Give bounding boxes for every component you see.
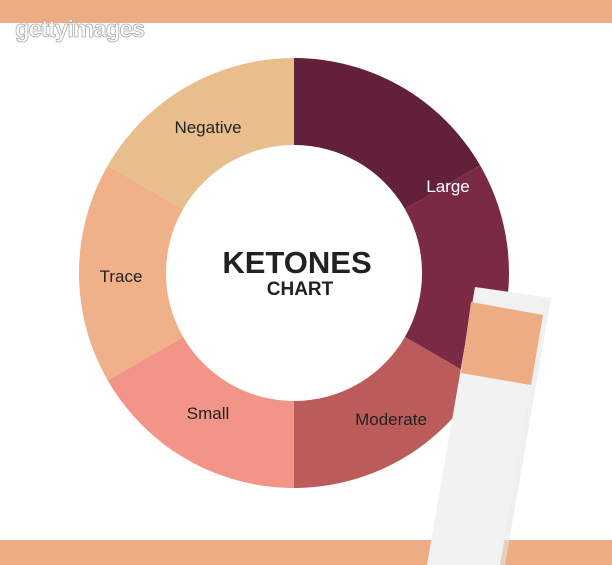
strip pad bbox=[461, 302, 543, 385]
label: Small: Small bbox=[187, 404, 229, 423]
segment: Negative bbox=[108, 58, 294, 209]
title: KETONES bbox=[222, 245, 372, 280]
segment: Moderate bbox=[294, 337, 480, 488]
test strip bbox=[427, 287, 551, 565]
label: Trace: Trace bbox=[100, 267, 142, 286]
bottom band bbox=[0, 540, 612, 565]
watermark text: gettyimages bbox=[15, 16, 145, 43]
segment: Large bbox=[405, 166, 509, 380]
top band bbox=[0, 0, 612, 23]
donut chart bbox=[79, 58, 509, 488]
subtitle: CHART bbox=[267, 279, 334, 300]
label: Moderate: Moderate bbox=[355, 410, 427, 429]
label: Negative: Negative bbox=[174, 118, 242, 137]
segment: Trace bbox=[79, 166, 183, 380]
segment: Small bbox=[108, 337, 294, 488]
label: Large: Large bbox=[426, 177, 470, 196]
segment: top dark bbox=[294, 58, 480, 209]
